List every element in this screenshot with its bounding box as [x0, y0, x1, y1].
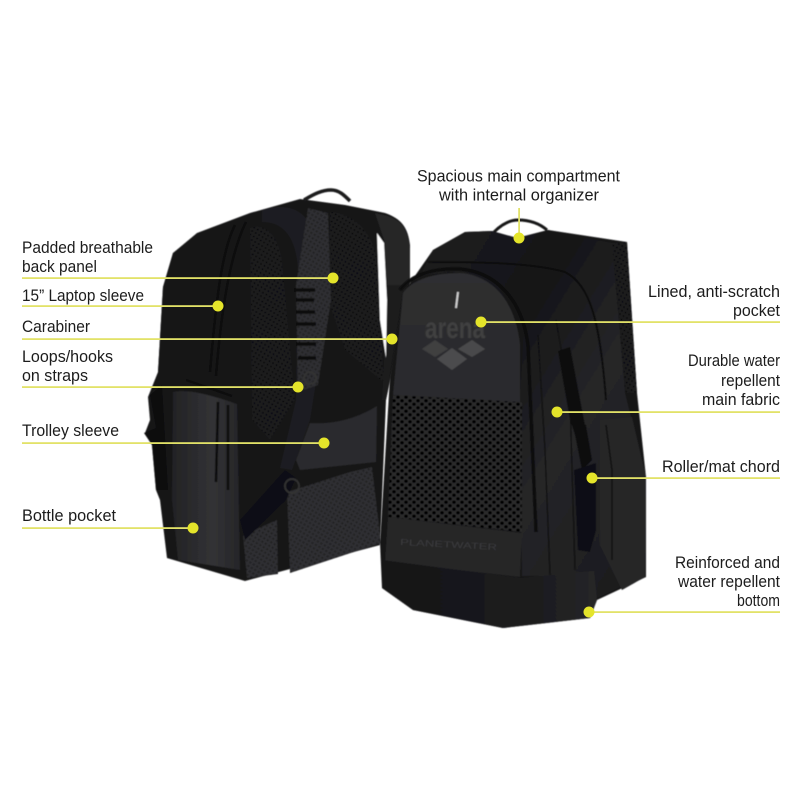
- callout: bottle pocket: Bottle pocket: [22, 507, 116, 525]
- callout: main fabric: repellent: [721, 372, 780, 390]
- callout: anti-scratch pocket: pocket: [733, 302, 780, 320]
- callout: main compartment: [417, 168, 620, 244]
- seam lines: [538, 320, 575, 575]
- front upper panel: [393, 273, 520, 402]
- rear top handle: [304, 190, 350, 201]
- front grab handle: [494, 220, 547, 232]
- lumbar panel: [296, 406, 377, 470]
- strap loops: [294, 290, 316, 384]
- logo: arena: [425, 312, 485, 345]
- callout: main fabric: Durable water: [688, 352, 780, 370]
- callout: loops and hooks: Loops/hooks: [22, 348, 113, 366]
- lower band: [385, 517, 522, 577]
- callout: roller chord: Roller/mat chord: [662, 458, 780, 476]
- callout: bottle pocket: [22, 507, 198, 534]
- callout: loops and hooks: [22, 348, 304, 392]
- callout: reinforced bottom: Reinforced and: [675, 554, 780, 572]
- callout: trolley sleeve: Trolley sleeve: [22, 422, 119, 440]
- side bottle pocket: [172, 391, 240, 570]
- callout: laptop sleeve: 15” Laptop sleeve: [22, 287, 144, 305]
- laptop compartment zipper: [210, 222, 246, 376]
- callout: laptop sleeve: [22, 287, 224, 312]
- pocket zippers: [186, 380, 232, 490]
- mesh pocket: [388, 395, 522, 532]
- callout: main compartment: Spacious main compartment: [417, 168, 620, 186]
- lower back area: [312, 330, 383, 422]
- velcro strap: [558, 347, 585, 458]
- callout: padded back panel: back panel: [22, 258, 97, 276]
- callout: reinforced bottom: water repellent: [677, 573, 780, 591]
- main zipper: [400, 269, 536, 532]
- top gloss panel: [420, 230, 646, 598]
- planetwater print: PLANETWATER: [400, 537, 498, 552]
- callout: carabiner: [22, 318, 398, 344]
- front silhouette: [380, 230, 646, 628]
- callout: carabiner: Carabiner: [22, 318, 90, 336]
- callout: main fabric: [552, 352, 780, 418]
- side pocket: [600, 417, 646, 590]
- callout: reinforced bottom: bottom: [737, 592, 780, 610]
- shoulder strap left: [262, 207, 318, 470]
- bottom back mesh: [287, 467, 381, 573]
- rear upper body: [158, 214, 252, 400]
- side back mesh strip: [612, 242, 637, 393]
- rear silhouette: [145, 199, 410, 581]
- logo: [422, 312, 485, 370]
- backpack: rear view: [144, 190, 410, 581]
- callout: main compartment: with internal organizer: [438, 186, 599, 204]
- zipper pull: [456, 292, 458, 308]
- logo diamonds: [422, 340, 485, 370]
- side straps: [144, 385, 168, 490]
- callout: padded back panel: [22, 239, 338, 284]
- callout: loops and hooks: on straps: [22, 367, 88, 385]
- top pocket zipper: [428, 262, 606, 400]
- callout: anti-scratch pocket: Lined, anti-scratch: [648, 283, 780, 301]
- base panel: [382, 560, 597, 628]
- callout: reinforced bottom: [584, 554, 780, 618]
- lower side strap: [574, 463, 596, 552]
- callout: trolley sleeve: [22, 422, 330, 448]
- strap webbing mesh: [296, 208, 331, 392]
- callout: anti-scratch pocket: [476, 283, 780, 328]
- right shoulder strap: [375, 213, 410, 285]
- callout: roller chord: [586, 458, 780, 484]
- callout: padded back panel: Padded breathable: [22, 239, 153, 257]
- gap between strap and back: [377, 233, 387, 358]
- upper back mesh: [328, 212, 384, 383]
- lower strap and buckle: [240, 470, 296, 540]
- callout: main fabric: main fabric: [702, 391, 780, 409]
- back mesh column: [250, 227, 295, 440]
- backpack: front view: [380, 220, 646, 628]
